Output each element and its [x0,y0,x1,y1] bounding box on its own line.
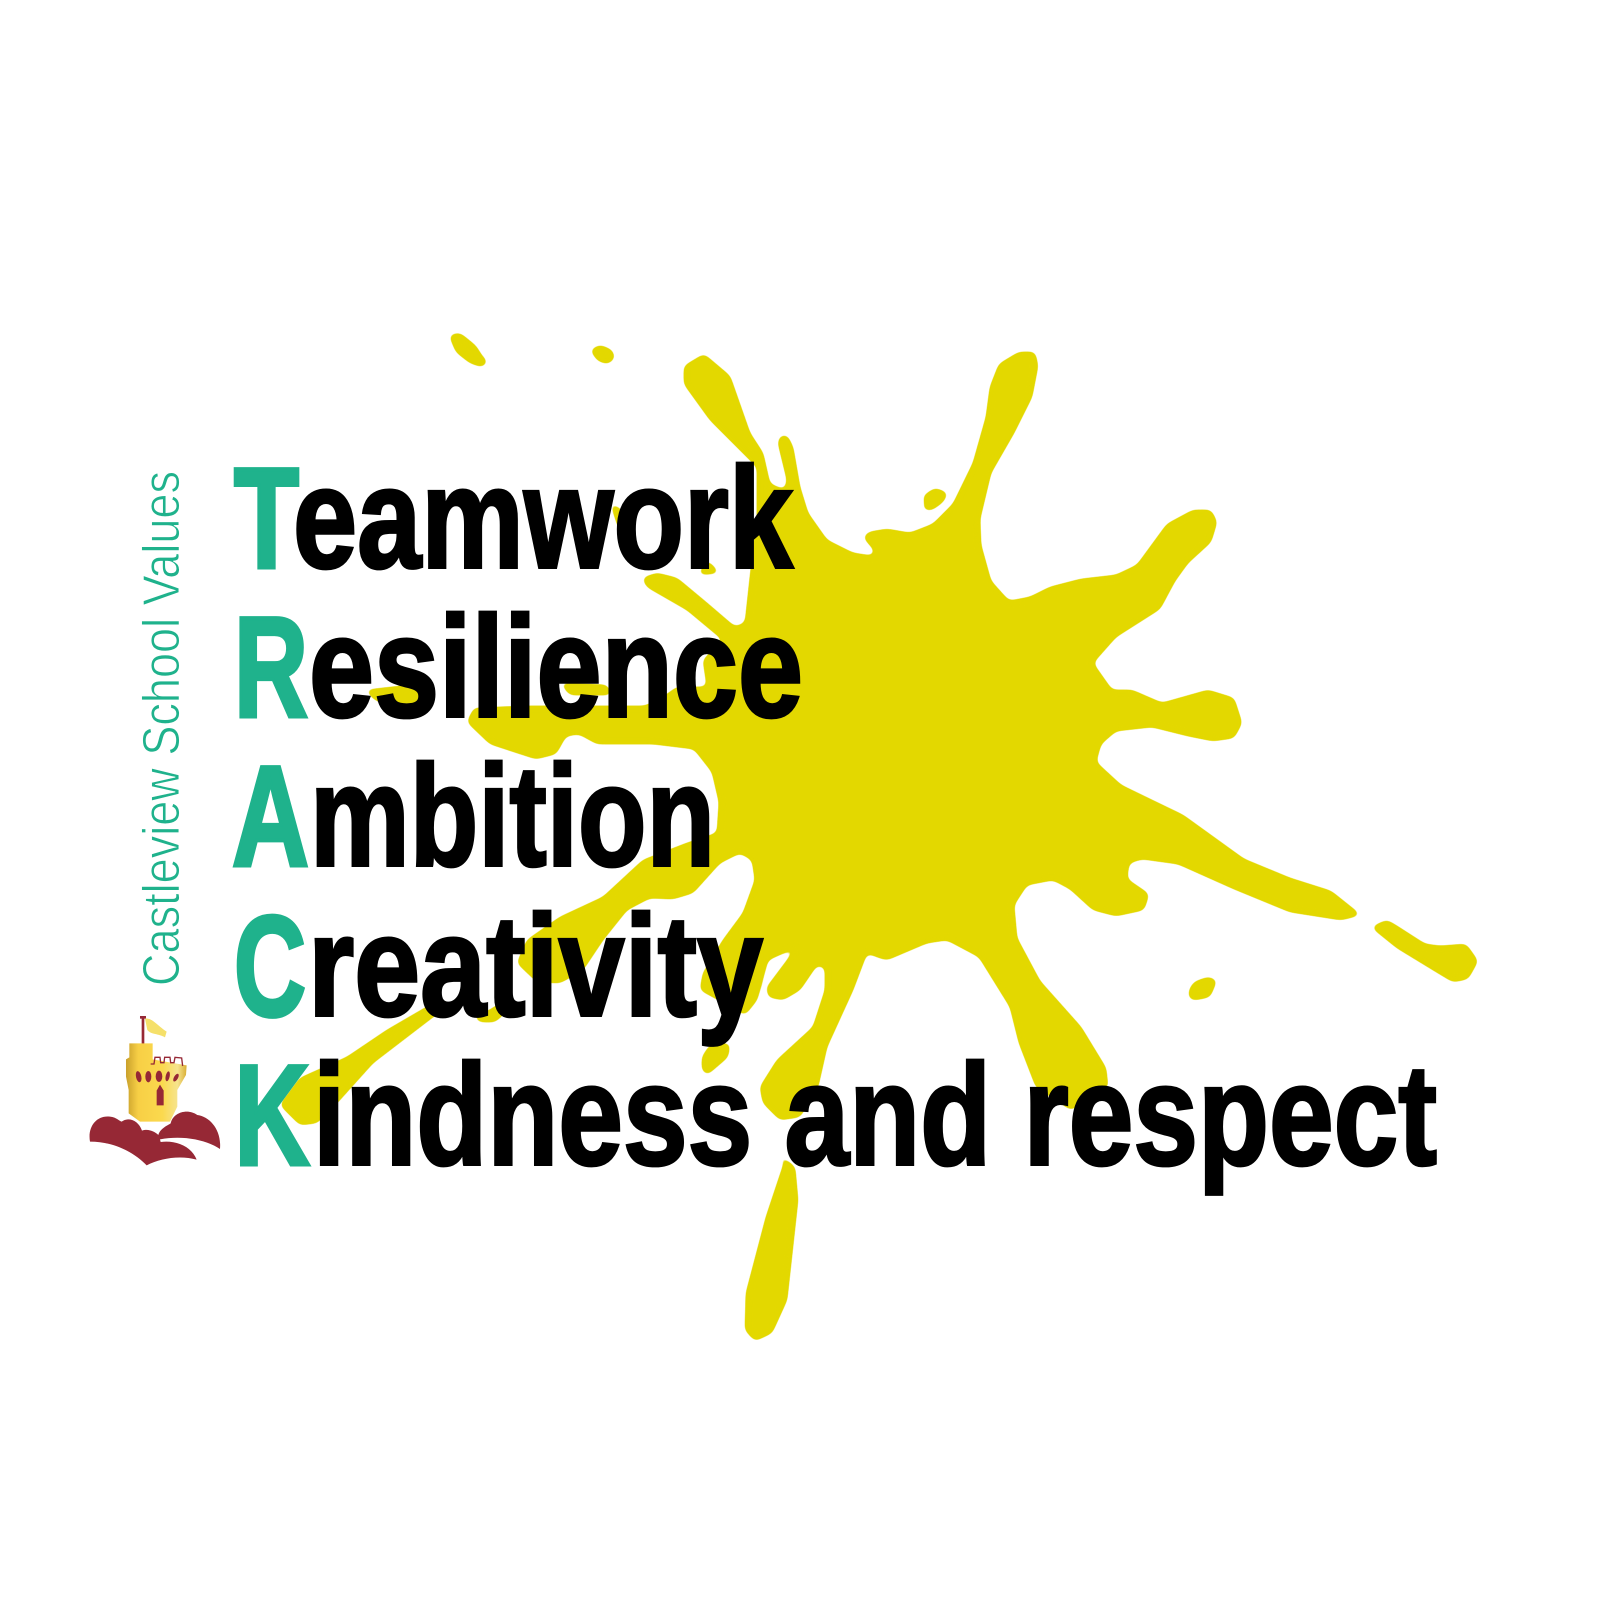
vertical caption: Castleview School Values: Castleview School Values [133,471,191,986]
tower windows [135,1071,180,1105]
value line: Teamwork: T [234,440,299,598]
maroon hills [90,1112,220,1165]
splat droplets [449,333,488,367]
splat main body [467,352,1361,1120]
value line: Kindness and respect: K [234,1036,310,1196]
tower [126,1043,187,1122]
flag pole and flag [140,1016,167,1044]
value line: Ambition [232,736,715,896]
icon: castle logo [90,1016,220,1165]
value line: Teamwork: eamwork [293,438,794,598]
value line: Creativity: C [234,888,306,1046]
yellow paint splat [280,333,1478,1341]
value line: Resilience: R [234,588,308,748]
value line: Ambition: A [232,738,309,896]
value line: Resilience: esilience [309,586,803,748]
value line: Ambition: mbition [310,736,715,896]
value line: Creativity: reativity [308,886,763,1046]
